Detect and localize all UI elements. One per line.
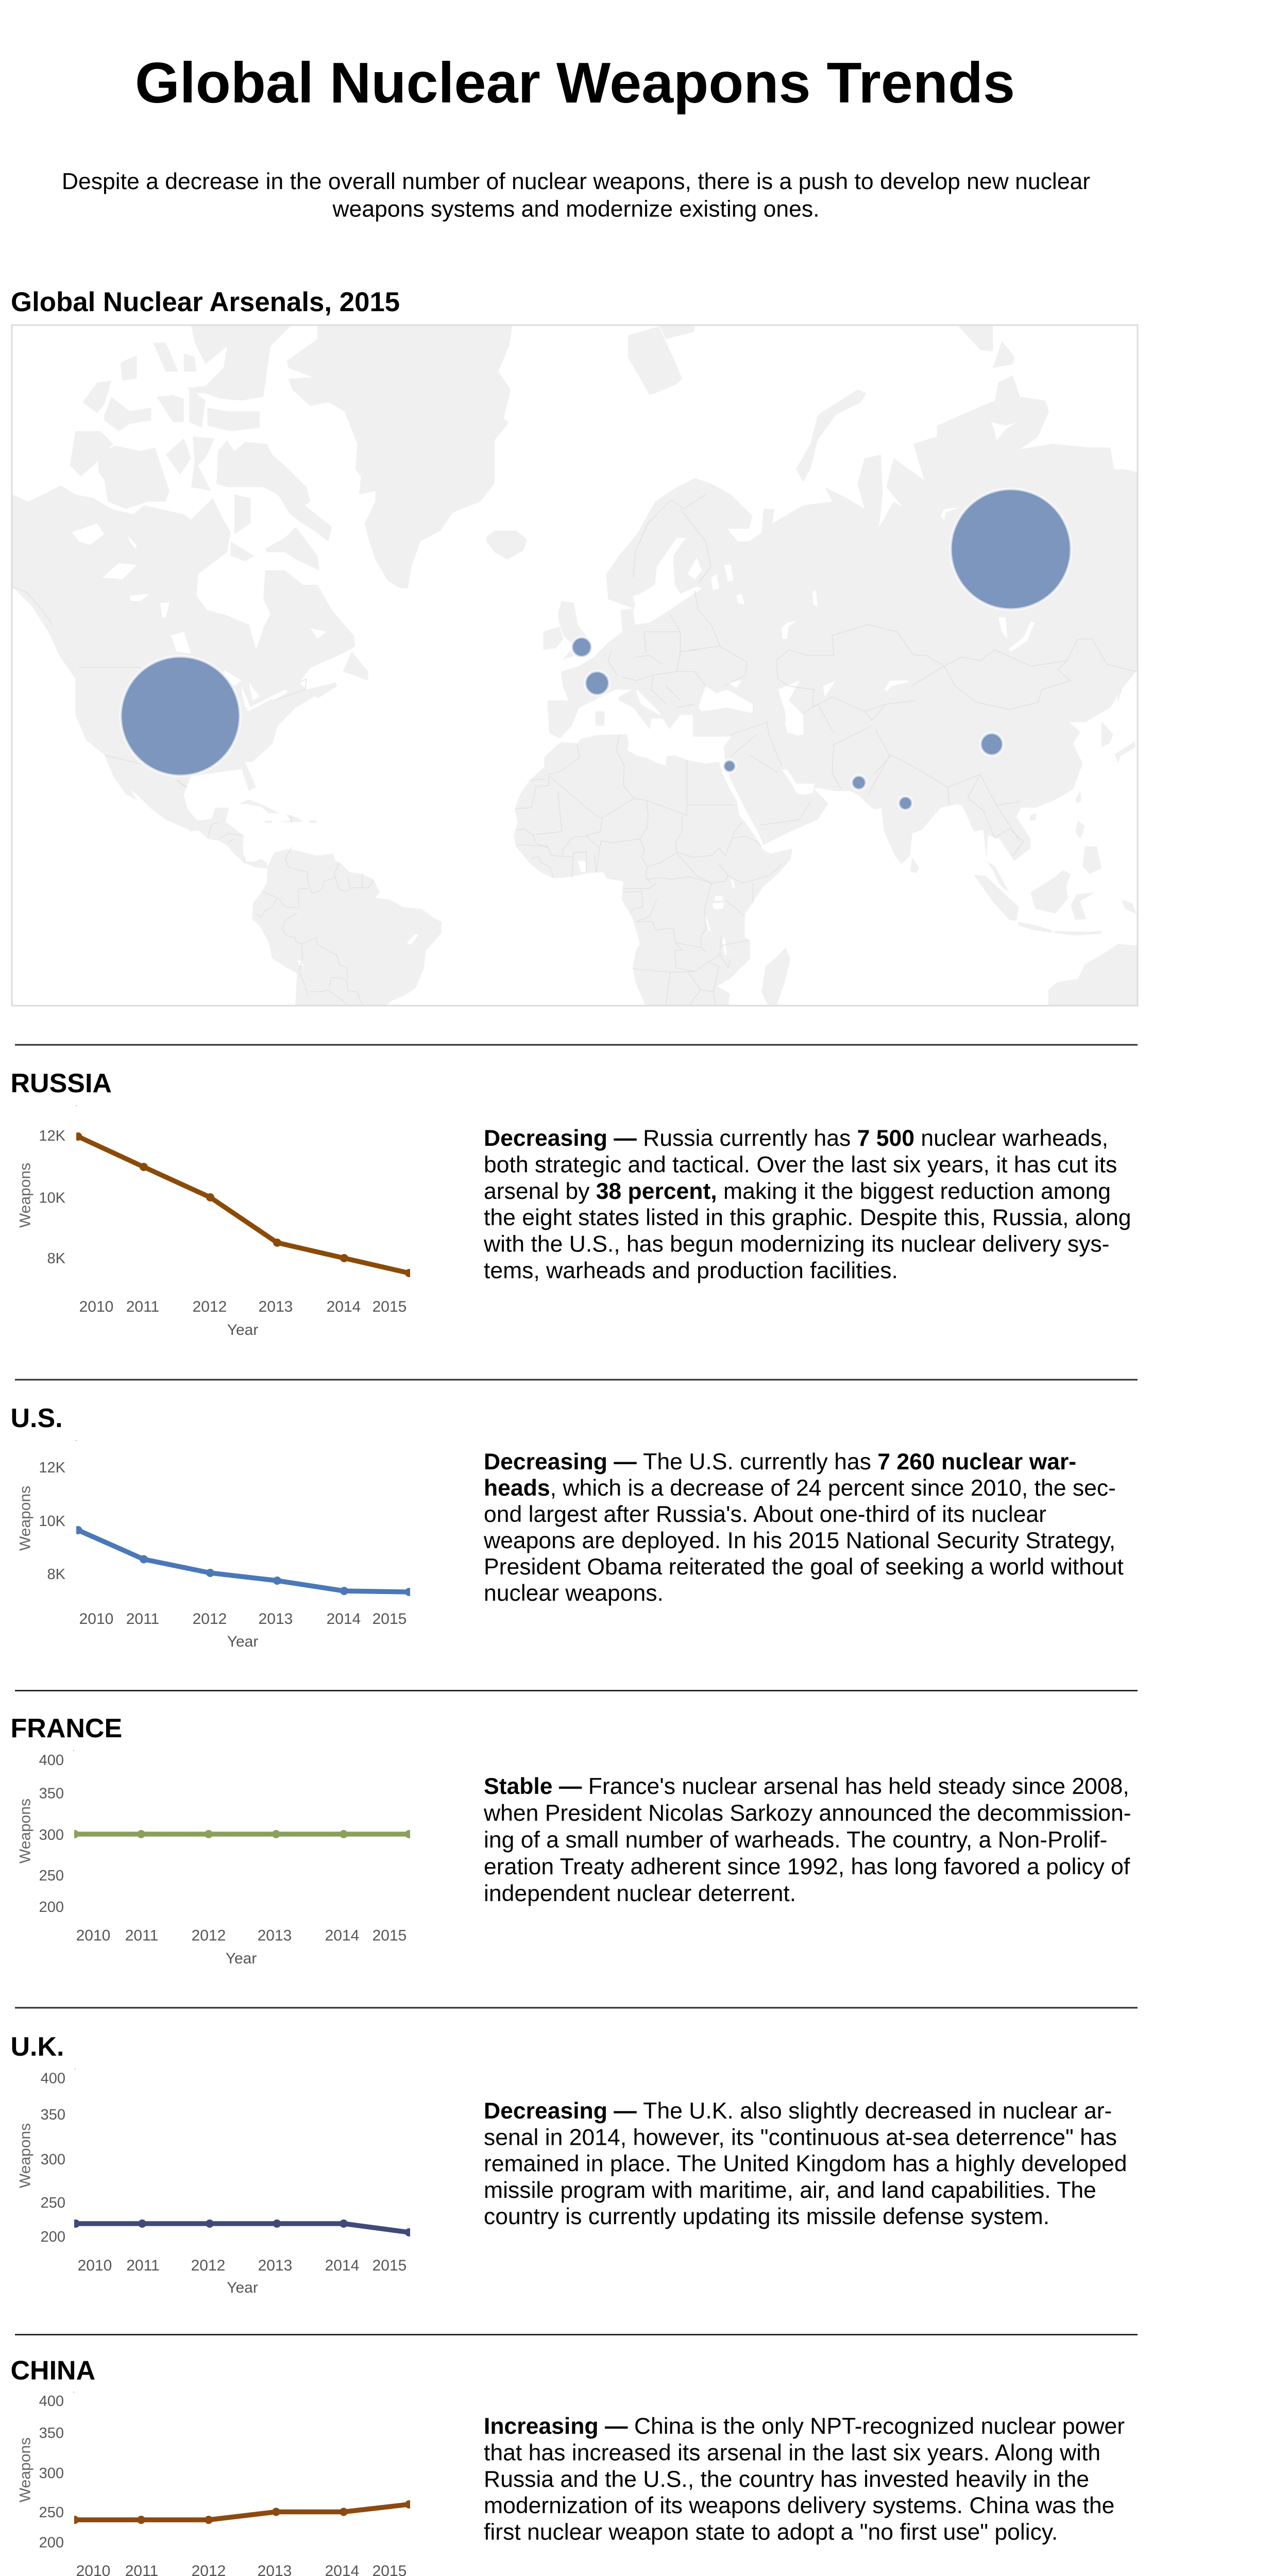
line chart: U.K.: 300 (41, 2151, 65, 2168)
text: Russia: Decreasing — Russia currently has 7 500 nuclear warheads, (484, 1126, 1108, 1151)
bubble: Russia (951, 489, 1071, 609)
line chart: Russia: 2012 (193, 1298, 227, 1315)
line chart: U.S.: 2011 (126, 1611, 159, 1628)
heading: France: FRANCE (10, 1714, 122, 1743)
text: Russia: the eight states listed in this graphic. Despite this, Russia, along (484, 1205, 1131, 1230)
text: China: modernization of its weapons delivery systems. China was the (484, 2493, 1114, 2518)
line chart: Russia: 10K (39, 1190, 66, 1207)
text: China: Russia and the U.S., the country has invested heavily in the (484, 2467, 1089, 2492)
line chart: China: 350 (39, 2425, 64, 2442)
line chart: China (16, 2392, 413, 2576)
text: Russia: arsenal by 38 percent, making it the biggest reduction among (484, 1179, 1111, 1204)
line chart: U.K. (16, 2069, 413, 2296)
line chart: France: 200 (39, 1899, 64, 1916)
text: U.S.: nuclear weapons. (484, 1581, 664, 1606)
text: U.S.: heads, which is a decrease of 24 percent since 2010, the sec- (484, 1476, 1116, 1501)
text: China: that has increased its arsenal in the last six years. Along with (484, 2440, 1100, 2465)
panel: world map with arsenal bubbles (12, 325, 1139, 1006)
line chart: U.K.: Weapons (16, 2123, 34, 2188)
heading: global nuclear arsenals: Global Nuclear Arsenals, 2015 (11, 287, 400, 317)
text: China (484, 2414, 1125, 2545)
heading: Russia: RUSSIA (10, 1069, 112, 1098)
text: France: independent nuclear deterrent. (484, 1881, 796, 1906)
line chart: Russia: 12K (39, 1128, 66, 1144)
heading: U.S.: U.S. (10, 1403, 63, 1433)
line chart: U.S.: Weapons (16, 1486, 34, 1551)
line chart: U.S.: 12K (39, 1460, 66, 1476)
subtitle: weapons systems and modernize existing ones. (332, 197, 819, 222)
text: France: Stable — France's nuclear arsenal has held steady since 2008, (484, 1774, 1129, 1799)
line chart: France: 400 (39, 1752, 64, 1769)
line chart: Russia: Weapons (16, 1163, 34, 1228)
line chart: France: 350 (39, 1786, 64, 1802)
panel: Russia (10, 1069, 1131, 1338)
line chart: U.K.: 2014 (325, 2257, 359, 2274)
line chart: France: Year (226, 1950, 257, 1967)
line chart: U.K.: 200 (41, 2229, 65, 2245)
bubble: France (585, 671, 609, 696)
bubble: Israel (723, 760, 736, 772)
text: France: ing of a small number of warheads. The country, a Non-Prolif- (484, 1827, 1107, 1853)
line chart: U.S.: 10K (39, 1513, 66, 1530)
line chart: Russia: 2014 (327, 1298, 361, 1315)
text: U.S.: Decreasing — The U.S. currently has 7 260 nuclear war- (484, 1449, 1076, 1475)
line chart: France: 2011 (125, 1927, 158, 1944)
text: Russia: with the U.S., has begun modernizing its nuclear delivery sys- (483, 1232, 1109, 1257)
line chart: Russia (16, 1105, 413, 1338)
text: U.K.: Decreasing — The U.K. also slightly decreased in nuclear ar- (484, 2098, 1112, 2124)
bubble: India (899, 796, 912, 810)
line chart: U.K.: 350 (41, 2107, 65, 2123)
bubble: Pakistan (852, 775, 866, 790)
bubble: China (980, 733, 1003, 755)
text: U.S.: ond largest after Russia's. About one-third of its nuclear (484, 1502, 1046, 1527)
line chart: China: Weapons (16, 2437, 34, 2502)
text: U.K.: remained in place. The United Kingdom has a highly developed (484, 2151, 1127, 2177)
text: Russia (483, 1126, 1131, 1283)
subtitle: Despite a decrease in the overall number of nuclear weapons, there is a push to develop new nuclear (62, 169, 1090, 194)
line chart: U.K.: 2010 (78, 2257, 112, 2274)
text: U.K. (484, 2098, 1127, 2229)
subtitle (62, 169, 1090, 222)
line chart: U.K.: 400 (41, 2070, 65, 2087)
line chart: Russia: 2013 (259, 1298, 293, 1315)
bubble: United States (121, 656, 240, 776)
line chart: U.S.: 2010 (79, 1611, 113, 1628)
text: U.K.: senal in 2014, however, its "continuous at-sea deterrence" has (484, 2125, 1117, 2150)
line chart: U.S.: 2013 (259, 1611, 293, 1628)
line chart: France: 300 (39, 1827, 64, 1843)
line chart: U.K.: 2011 (126, 2257, 160, 2274)
panel: United States (10, 1403, 1124, 1650)
panel: China (10, 2355, 1125, 2576)
line chart: Russia: Year (227, 1321, 258, 1338)
text: France (483, 1774, 1131, 1906)
line chart: U.S.: 8K (47, 1566, 66, 1583)
line chart: Russia: 2011 (126, 1298, 159, 1315)
line chart: France (16, 1750, 413, 1967)
line chart: China: 300 (39, 2465, 64, 2482)
line chart: China: 400 (39, 2393, 64, 2410)
line chart: Russia: 2015 (372, 1298, 406, 1315)
line chart: U.S. (16, 1440, 413, 1650)
line chart: France: 2014 (325, 1927, 359, 1944)
heading: U.K.: U.K. (10, 2032, 64, 2062)
text: China: Increasing — China is the only NPT-recognized nuclear power (484, 2414, 1125, 2439)
text: U.S. (483, 1449, 1124, 1606)
panel: United Kingdom (10, 2032, 1127, 2296)
text: Russia: both strategic and tactical. Over the last six years, it has cut its (484, 1152, 1117, 1177)
line chart: France: 2015 (372, 1927, 406, 1944)
line chart: France: 250 (39, 1868, 64, 1884)
text: France: eration Treaty adherent since 1992, has long favored a policy of (484, 1854, 1130, 1879)
line chart: France: 2013 (258, 1927, 292, 1944)
line chart: France: 2012 (192, 1927, 226, 1944)
heading: China: CHINA (10, 2355, 95, 2385)
text: Russia: tems, warheads and production facilities. (484, 1258, 898, 1283)
line chart: China: 200 (39, 2535, 64, 2551)
panel: France (10, 1714, 1131, 1967)
line chart: U.K.: 2012 (191, 2257, 225, 2274)
line chart: China: 250 (39, 2504, 64, 2521)
text: France: when President Nicolas Sarkozy announced the decommission- (483, 1801, 1131, 1826)
line chart: U.S.: Year (227, 1633, 258, 1650)
line chart: U.K.: 2015 (372, 2257, 406, 2274)
text: U.S.: President Obama reiterated the goal of seeking a world without (484, 1554, 1124, 1580)
title: Global Nuclear Weapons Trends (135, 50, 1015, 115)
line chart: U.K.: 250 (41, 2195, 65, 2211)
text: U.K.: country is currently updating its missile defense system. (484, 2204, 1049, 2229)
line chart: U.S.: 2014 (327, 1611, 361, 1628)
line chart: U.K.: Year (227, 2279, 258, 2296)
text: U.S.: weapons are deployed. In his 2015 National Security Strategy, (483, 1528, 1115, 1553)
line chart: Russia: 8K (47, 1250, 66, 1267)
line chart: U.S.: 2015 (372, 1611, 406, 1628)
text: U.K.: missile program with maritime, air, and land capabilities. The (484, 2178, 1096, 2203)
line chart: France: 2010 (76, 1927, 110, 1944)
line chart: U.S.: 2012 (193, 1611, 227, 1628)
text: China: first nuclear weapon state to adopt a "no first use" policy. (484, 2520, 1058, 2545)
bubble: United Kingdom (572, 637, 591, 657)
line chart: U.K.: 2013 (258, 2257, 292, 2274)
line chart: Russia: 2010 (79, 1298, 113, 1315)
line chart: France: Weapons (16, 1799, 34, 1863)
